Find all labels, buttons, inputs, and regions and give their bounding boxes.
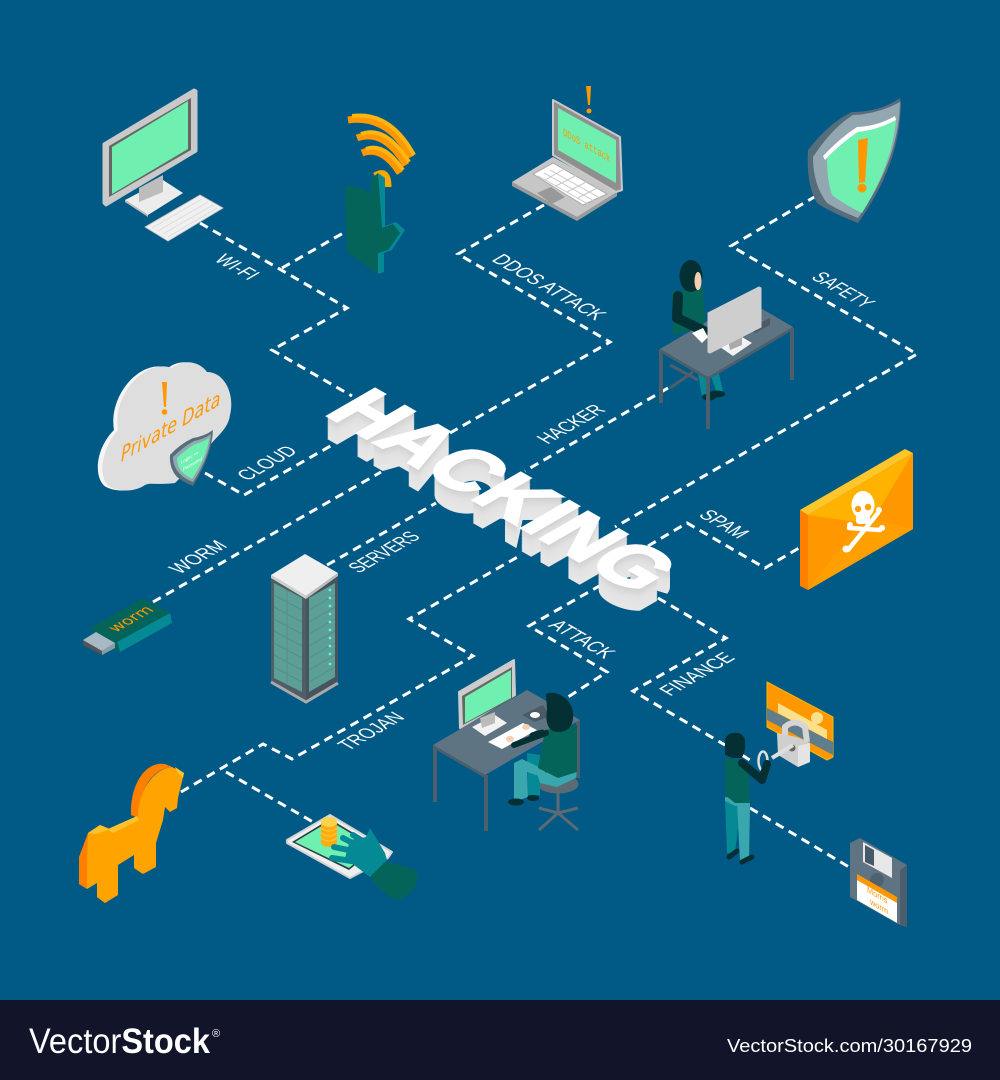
connector: hacker <box>525 388 668 471</box>
shield body <box>808 98 901 223</box>
horse front <box>87 767 184 903</box>
label <box>857 874 897 923</box>
warning mark <box>162 382 167 415</box>
connector: wi-fi <box>200 223 352 396</box>
rack body <box>271 554 338 702</box>
arm <box>742 763 767 780</box>
keyboard and mouse <box>488 705 550 749</box>
illustration: hacker with key <box>725 733 767 862</box>
screen text: DDoS attack <box>563 126 611 166</box>
label: DDOS ATTACK: DDOS ATTACK <box>486 251 611 323</box>
desk <box>433 690 580 831</box>
chair base <box>670 365 698 388</box>
sleeve <box>370 862 418 900</box>
icon: padlock and key <box>758 722 810 770</box>
label: WORM: WORM <box>164 537 233 577</box>
desk <box>659 299 794 429</box>
hand <box>345 173 405 274</box>
disk body <box>850 838 907 927</box>
lock body <box>777 733 810 767</box>
card <box>767 682 833 760</box>
label: CLOUD: CLOUD <box>232 443 303 484</box>
envelope faces <box>800 449 913 590</box>
person <box>506 693 577 787</box>
monitor stand <box>125 175 183 217</box>
label: FINANCE: FINANCE <box>654 649 741 699</box>
icon: safety shield <box>808 98 901 223</box>
tablet <box>287 815 392 878</box>
wi-fi arcs <box>348 115 414 187</box>
right panel <box>309 583 335 692</box>
skull and crossbones <box>842 491 885 552</box>
illustration: hacker seated at computer <box>433 660 580 831</box>
icon: desktop computer <box>104 90 223 241</box>
connector: worm <box>153 472 381 602</box>
title: HACKING 3D text: HACKING <box>308 378 699 603</box>
connector: safety <box>615 196 917 527</box>
icon: credit card <box>767 682 833 760</box>
label: ATTACK: ATTACK <box>543 617 620 662</box>
person <box>672 260 705 335</box>
keyboard <box>145 195 223 241</box>
cloud back <box>98 362 227 491</box>
label: Morris <box>867 884 887 906</box>
connector: cloud <box>205 444 334 495</box>
small shield: Password <box>183 456 202 473</box>
laptop lid <box>553 100 622 192</box>
coins <box>321 817 337 847</box>
laptop base <box>512 157 617 221</box>
monitor back <box>708 287 761 356</box>
card highlight <box>778 703 827 739</box>
icon: tablet with hand <box>287 815 418 900</box>
cloud text: Private Data <box>121 386 220 467</box>
horse back side <box>79 764 172 903</box>
icon: hand with wi-fi <box>345 115 414 274</box>
label: worm <box>869 895 888 916</box>
small shield <box>170 430 213 486</box>
footer logo: ® <box>212 1028 220 1040</box>
connector: ddos attack <box>450 205 610 433</box>
usb body <box>90 598 172 652</box>
shackle <box>785 722 807 742</box>
icon: private data cloud <box>98 362 231 491</box>
torso <box>725 757 750 803</box>
connector: servers <box>327 503 436 565</box>
label: SERVERS: SERVERS <box>343 528 426 576</box>
mouse pad <box>750 318 770 333</box>
footer logo: VectorStock <box>29 1022 210 1061</box>
legs <box>508 753 545 806</box>
monitor screen <box>104 90 196 205</box>
hood <box>725 733 745 758</box>
footer url: VectorStock.com/30167929 <box>727 1036 972 1056</box>
chair <box>539 776 578 830</box>
label: TROJAN: TROJAN <box>333 709 410 754</box>
footer bar <box>0 1000 1000 1080</box>
icon: worm usb drive <box>83 598 172 655</box>
label: HACKER: HACKER <box>532 401 611 447</box>
legs <box>698 370 725 400</box>
usb connector <box>83 632 115 655</box>
label: SAFETY: SAFETY <box>806 269 880 312</box>
label: WI-FI: WI-FI <box>209 251 264 283</box>
icon: trojan horse <box>79 764 184 903</box>
connector: trojan <box>181 555 521 822</box>
icon: laptop <box>512 86 622 221</box>
label: SPAM: SPAM <box>693 507 754 542</box>
icon: spam envelope <box>800 449 913 590</box>
warning mark <box>586 86 592 114</box>
keyboard <box>692 328 708 343</box>
warning mark <box>858 138 868 192</box>
monitor <box>459 660 515 736</box>
usb text: worm <box>103 603 158 635</box>
connector: attack <box>529 585 607 697</box>
connector: spam <box>648 523 799 568</box>
metal shutter <box>863 842 892 887</box>
connector: finance <box>633 598 849 867</box>
left panel <box>274 583 302 692</box>
saddle and ear <box>88 767 184 834</box>
icon: server rack <box>271 554 338 702</box>
hand <box>332 828 387 877</box>
key <box>758 745 793 770</box>
icon: morris worm floppy disk <box>850 838 907 927</box>
legs <box>725 797 752 862</box>
small shield: Login: ••• <box>181 450 199 466</box>
illustration: hacker at desk <box>659 260 794 429</box>
cloud face <box>102 362 231 491</box>
card stripe <box>767 708 833 755</box>
